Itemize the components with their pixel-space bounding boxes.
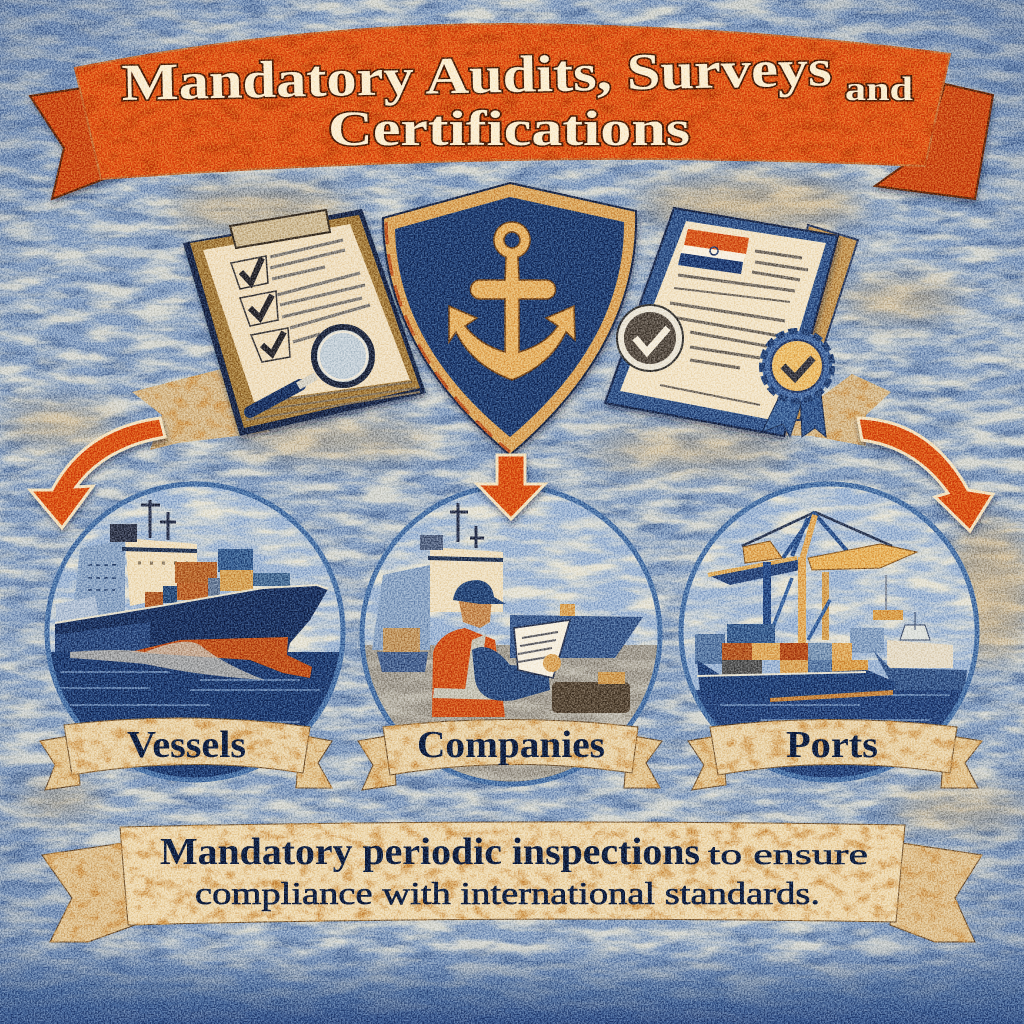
vessels ribbon xyxy=(64,718,310,775)
title word: and: and xyxy=(845,71,913,108)
ribbon rosette xyxy=(762,331,832,437)
panel: companies xyxy=(355,480,670,790)
ports ribbon tails xyxy=(688,735,982,790)
background vessel superstructure xyxy=(372,565,430,650)
title line one: Mandatory Audits, Surveys xyxy=(121,40,832,112)
funnel and masts xyxy=(110,524,137,542)
caption ribbon tails xyxy=(42,842,982,942)
hand xyxy=(543,654,561,672)
face xyxy=(459,600,492,628)
banner ribbon xyxy=(75,24,950,179)
icon: clipboard checklist with magnifier xyxy=(183,209,426,436)
tan ribbon behind the documents, left xyxy=(132,368,270,450)
port vessel hull xyxy=(697,660,895,702)
flag xyxy=(678,229,749,274)
label: Companies: Companies xyxy=(417,724,605,766)
far city xyxy=(850,628,884,653)
hull xyxy=(55,586,328,654)
company circle scene xyxy=(364,492,658,782)
crates and small boat xyxy=(383,628,420,652)
port circle rim xyxy=(681,484,977,780)
bow wave xyxy=(70,642,265,680)
caption line one end: to ensure xyxy=(708,838,868,871)
crane xyxy=(708,512,917,645)
title banner xyxy=(30,24,993,199)
red boot topping and bulb xyxy=(130,637,312,678)
shield blue field xyxy=(395,197,624,437)
sleeve xyxy=(472,647,550,701)
arrow: center, to companies xyxy=(477,455,545,519)
icon: certificate with flag and seals xyxy=(605,208,858,437)
document xyxy=(514,620,570,678)
cap xyxy=(453,580,506,604)
lower page edges xyxy=(246,382,420,420)
companies ribbon xyxy=(383,720,638,775)
bottom caption banner xyxy=(42,822,982,942)
clipboard board xyxy=(183,209,426,436)
panel: ports xyxy=(675,480,985,790)
vessels ribbon tails xyxy=(40,735,332,790)
certificate text lines xyxy=(660,251,808,405)
check rows xyxy=(231,240,370,362)
luggage cases xyxy=(552,682,630,713)
banner tail: right xyxy=(875,84,993,199)
port circle scene xyxy=(684,486,974,778)
shield frame xyxy=(383,183,636,455)
icon: anchor shield xyxy=(383,183,636,455)
checklist paper xyxy=(203,224,410,402)
title line two: Certifications xyxy=(328,100,690,156)
caption ribbon xyxy=(120,822,905,925)
caption line one bold: Mandatory periodic inspections xyxy=(160,831,700,873)
certificate frame xyxy=(605,208,838,436)
containers xyxy=(218,549,253,572)
container stack xyxy=(695,634,725,664)
tan ribbon behind the documents, right xyxy=(770,374,891,446)
arrow: right, to ports xyxy=(858,418,993,531)
label: Vessels: Vessels xyxy=(127,724,246,766)
far vessel xyxy=(887,640,953,668)
hanging container xyxy=(885,575,887,610)
vest xyxy=(432,628,505,717)
panel: vessels xyxy=(40,480,350,790)
company circle rim xyxy=(362,486,660,784)
vessel circle scene xyxy=(40,480,350,782)
far sea and quay ground xyxy=(355,645,670,785)
background ship hull xyxy=(510,615,643,658)
companies ribbon tails xyxy=(358,735,662,790)
caption line two: compliance with international standards. xyxy=(195,875,820,911)
label: Ports: Ports xyxy=(786,724,878,766)
banner tail: left xyxy=(30,86,122,199)
magnifying glass xyxy=(250,327,372,412)
sea xyxy=(50,652,340,778)
anchor xyxy=(449,222,575,380)
worker xyxy=(432,580,570,717)
clip xyxy=(230,210,330,248)
arrow: left, to vessels xyxy=(30,418,165,528)
certificate paper xyxy=(620,221,826,420)
deck line xyxy=(55,585,328,623)
superstructure xyxy=(74,542,125,615)
check seal xyxy=(617,305,683,371)
vessel circle rim xyxy=(47,484,343,780)
ports ribbon xyxy=(710,720,957,775)
